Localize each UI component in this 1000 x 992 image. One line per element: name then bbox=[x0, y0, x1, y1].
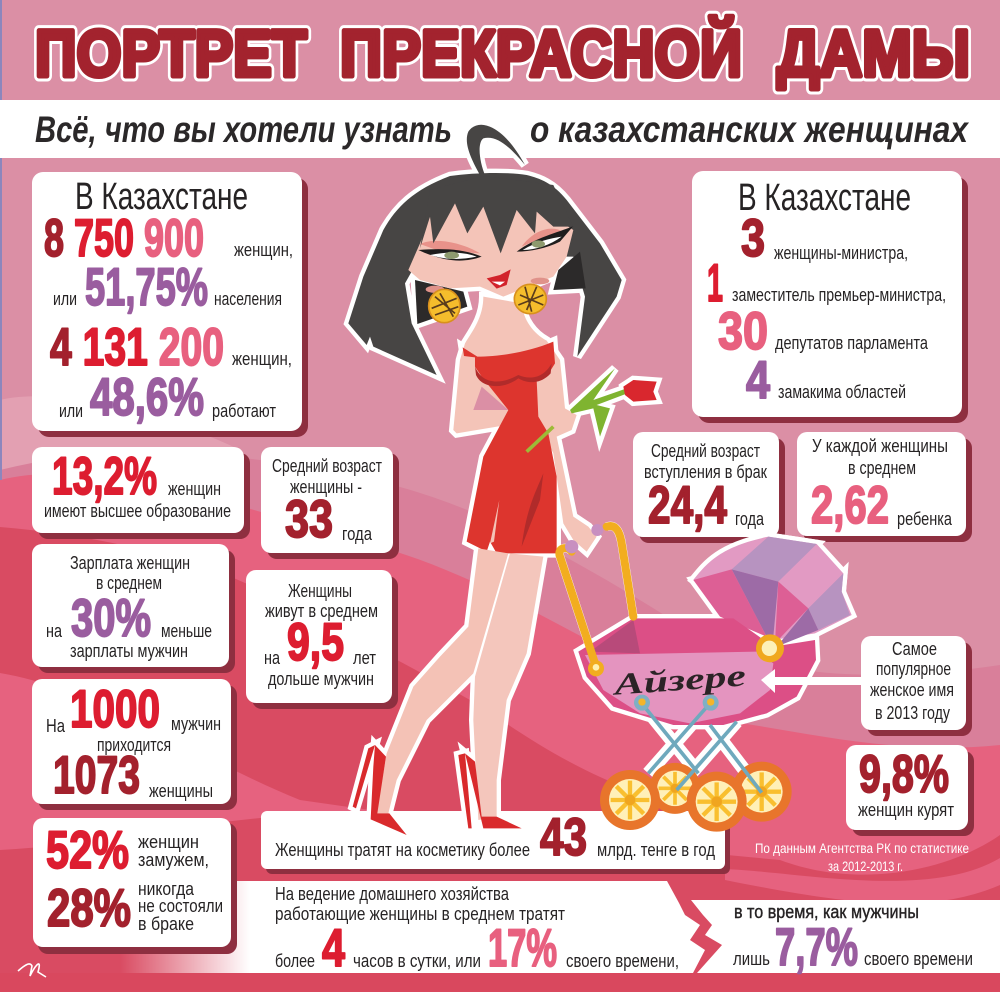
panel: marriage bbox=[33, 818, 237, 954]
arrow to name bbox=[761, 669, 862, 693]
text: housework women: работающие женщины в среднем тратят bbox=[275, 904, 565, 924]
panel: average age bbox=[261, 447, 399, 559]
wheels front bbox=[600, 770, 747, 832]
panel: children: в среднем bbox=[848, 458, 916, 478]
panel: politics: 4 bbox=[746, 351, 770, 410]
panel: marriage: никогда bbox=[138, 879, 195, 899]
panel: gender ratio: мужчин bbox=[171, 714, 221, 734]
panel: marriage age: вступления в брак bbox=[644, 462, 767, 482]
panel: politics: 1 bbox=[707, 254, 723, 313]
panel: smoking: женщин курят bbox=[858, 800, 954, 820]
panel: population bbox=[32, 172, 308, 437]
panel: higher education: женщин bbox=[168, 479, 221, 499]
panel: gender ratio: 1073 bbox=[53, 746, 140, 805]
earrings bbox=[429, 284, 546, 323]
panel: politics: В Казахстане bbox=[738, 177, 911, 219]
panel: marriage: 28% bbox=[47, 879, 131, 938]
frame bbox=[634, 695, 762, 793]
dress shading and stem bbox=[475, 363, 553, 547]
panel: popular name: популярное bbox=[876, 659, 951, 679]
basket bbox=[578, 618, 816, 725]
panel: salary: Зарплата женщин bbox=[70, 553, 190, 573]
text: housework women: 17% bbox=[488, 919, 557, 978]
panel: higher education bbox=[32, 447, 250, 539]
panel: politics: депутатов парламента bbox=[775, 333, 929, 353]
text: housework men: в то время, как мужчины bbox=[734, 902, 919, 922]
panel: marriage: в браке bbox=[138, 914, 194, 934]
panel: children: У каждой женщины bbox=[812, 436, 948, 456]
panel: average age: Средний возраст bbox=[272, 456, 382, 476]
face bbox=[408, 200, 573, 297]
panel: marriage: замужем, bbox=[138, 850, 209, 870]
panel: children bbox=[797, 432, 972, 542]
panel: politics: 30 bbox=[718, 302, 768, 361]
panel: marriage age: 24,4 bbox=[648, 476, 727, 535]
panel: population: женщин, bbox=[232, 349, 292, 369]
panel: marriage age bbox=[633, 432, 785, 543]
neck, shoulders, arms bbox=[453, 297, 597, 552]
panel: marriage age: года bbox=[735, 509, 765, 529]
panel: marriage: 52% bbox=[46, 821, 129, 880]
panel: popular name bbox=[861, 636, 972, 736]
panel: average age: года bbox=[342, 524, 373, 544]
subtitle band: Всё, что вы хотели узнать bbox=[35, 109, 452, 150]
panel: salary: 30% bbox=[71, 589, 151, 648]
text: housework women: На ведение домашнего хозяйства bbox=[275, 884, 510, 904]
panel: popular name: в 2013 году bbox=[875, 703, 950, 723]
panel: politics bbox=[692, 171, 968, 423]
details: face bbox=[418, 176, 573, 293]
panel: marriage age: Средний возраст bbox=[651, 441, 760, 461]
panel: life expectancy bbox=[246, 570, 398, 709]
panel: population: 4 131 200 bbox=[50, 318, 224, 377]
text: housework women: более bbox=[275, 951, 315, 971]
panel: life expectancy: на bbox=[264, 648, 281, 668]
panel: smoking bbox=[846, 745, 974, 836]
text: housework men: лишь bbox=[733, 949, 770, 969]
gap between arm and torso bbox=[473, 387, 508, 410]
panel: higher education: 13,2% bbox=[52, 447, 157, 506]
subtitle band bbox=[0, 100, 1000, 158]
name on stroller: Айзере bbox=[610, 659, 747, 702]
panel: popular name: женское имя bbox=[870, 680, 954, 700]
panel: marriage: не состояли bbox=[138, 896, 223, 916]
panel: politics: женщины-министра, bbox=[774, 243, 908, 263]
panel: cosmetics: 43 bbox=[540, 808, 587, 867]
text: housework men: 7,7% bbox=[775, 918, 858, 977]
illustration: woman with stroller bbox=[348, 125, 852, 835]
panel: population: 8 750 900 bbox=[44, 209, 204, 268]
text: housework men bbox=[733, 902, 973, 977]
panel: children: ребенка bbox=[897, 509, 953, 529]
artist signature bbox=[18, 964, 46, 977]
title: ДАМЫ bbox=[777, 16, 970, 90]
panel: average age: женщины - bbox=[290, 477, 362, 497]
panel: population: женщин, bbox=[234, 240, 293, 260]
panel: salary: зарплаты мужчин bbox=[70, 641, 188, 661]
dress bbox=[463, 342, 557, 553]
wheels back bbox=[649, 762, 792, 822]
panel: cosmetics: млрд. тенге в год bbox=[597, 840, 715, 860]
text: housework women: 4 bbox=[322, 919, 345, 978]
panel: population: населения bbox=[214, 289, 282, 309]
panel: cosmetics: Женщины тратят на косметику более bbox=[275, 840, 530, 860]
panel: marriage: женщин bbox=[138, 832, 199, 852]
hinge bbox=[756, 634, 784, 662]
panel: popular name: Самое bbox=[892, 639, 937, 659]
panel: politics: заместитель премьер-министра, bbox=[732, 285, 946, 305]
source note bbox=[755, 840, 969, 874]
panel: population: или bbox=[59, 401, 83, 421]
panel: salary: на bbox=[46, 621, 63, 641]
panel: salary: меньше bbox=[161, 621, 212, 641]
title bbox=[35, 15, 970, 90]
handle bbox=[559, 524, 633, 676]
panel: gender ratio: На bbox=[46, 716, 66, 736]
bottom white band bbox=[120, 881, 1000, 973]
title: ДАМЫ bbox=[777, 16, 970, 90]
panel: life expectancy: дольше мужчин bbox=[268, 669, 374, 689]
panel: salary bbox=[32, 544, 235, 673]
panel: gender ratio bbox=[32, 679, 237, 810]
panel: life expectancy: лет bbox=[353, 648, 376, 668]
panel: population: 51,75% bbox=[85, 258, 208, 317]
text: housework women bbox=[275, 884, 679, 978]
panel: population: или bbox=[53, 289, 77, 309]
panel: politics: замакима областей bbox=[778, 382, 906, 402]
white outline bbox=[348, 125, 852, 835]
panel: population: 48,6% bbox=[90, 368, 204, 427]
panel: children: 2,62 bbox=[811, 476, 889, 535]
hood bbox=[693, 537, 852, 647]
source note: за 2012-2013 г. bbox=[828, 858, 903, 874]
panel: salary: в среднем bbox=[96, 573, 162, 593]
legs bbox=[377, 548, 543, 820]
title: ПОРТРЕТ bbox=[35, 16, 307, 90]
panel: life expectancy: живут в среднем bbox=[265, 601, 378, 621]
panel: population: В Казахстане bbox=[75, 176, 248, 218]
text: housework women: своего времени, bbox=[566, 951, 679, 971]
text: housework women: часов в сутки, или bbox=[353, 951, 481, 971]
panel: life expectancy: Женщины bbox=[288, 581, 352, 601]
text: housework men: своего времени bbox=[864, 949, 973, 969]
title: ПРЕКРАСНОЙ bbox=[340, 15, 742, 90]
title: ПОРТРЕТ bbox=[35, 16, 307, 90]
panel: higher education: имеют высшее образование bbox=[44, 501, 231, 521]
panel: cosmetics bbox=[261, 808, 730, 874]
panel: population: работают bbox=[212, 401, 276, 421]
panel: gender ratio: приходится bbox=[97, 735, 171, 755]
shoes bbox=[353, 745, 522, 835]
tulip bbox=[570, 368, 657, 437]
panel: smoking: 9,8% bbox=[859, 745, 949, 804]
panel: average age: 33 bbox=[285, 490, 333, 549]
panel: politics: 3 bbox=[741, 209, 765, 268]
panel: gender ratio: женщины bbox=[149, 781, 213, 801]
panel: gender ratio: 1000 bbox=[70, 680, 160, 739]
panel: life expectancy: 9,5 bbox=[287, 613, 344, 672]
title: ПРЕКРАСНОЙ bbox=[340, 15, 742, 90]
hair bbox=[348, 125, 622, 375]
